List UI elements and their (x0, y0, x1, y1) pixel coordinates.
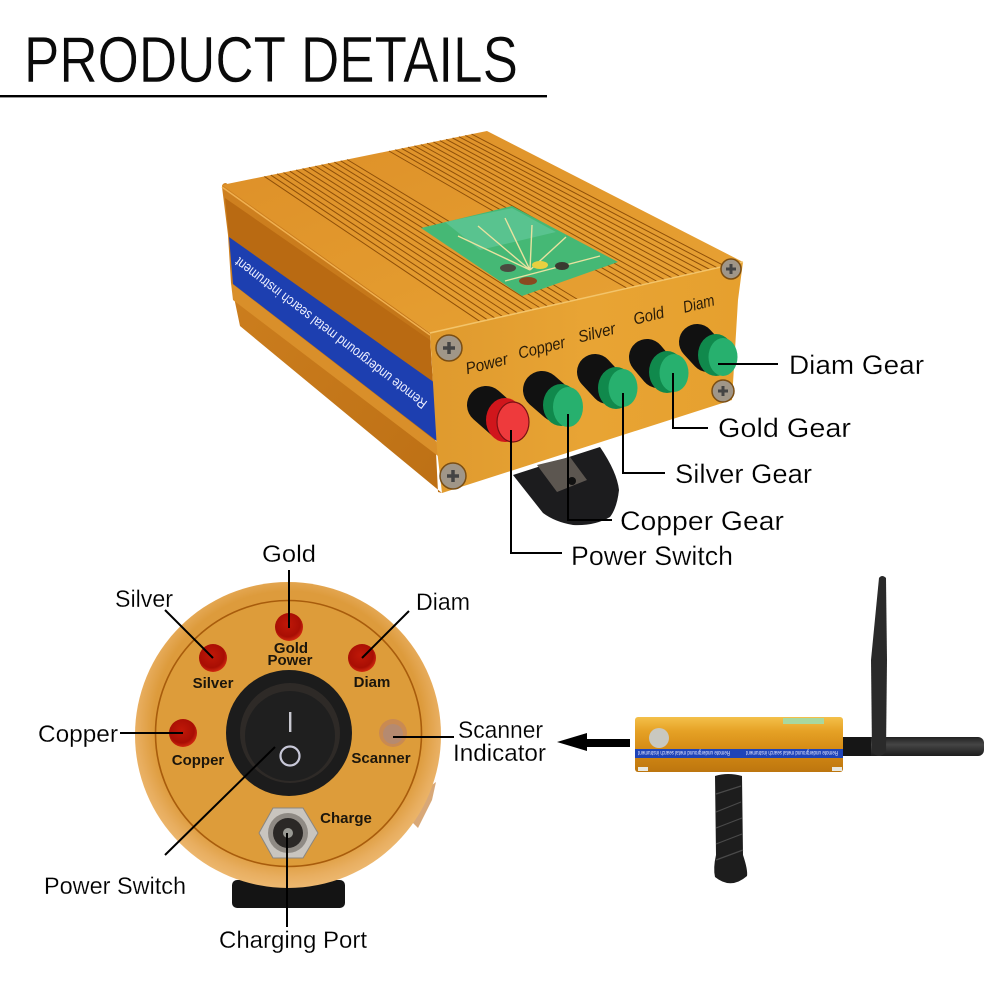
button: gold (green) (647, 351, 688, 393)
callout: gold led: Gold (262, 541, 316, 568)
mini sticker (783, 718, 824, 724)
title (0, 23, 547, 97)
arrow pointing to device end (557, 733, 630, 751)
callout: power switch (511, 430, 733, 571)
grip handle (714, 774, 747, 883)
LED: gold (275, 613, 303, 641)
antenna (871, 576, 887, 756)
callout: gold gear (673, 373, 851, 443)
callout: power switch: Power Switch (571, 541, 733, 571)
logo badge (649, 728, 669, 748)
callout: gold gear: Gold Gear (718, 413, 851, 443)
callout: copper gear: Copper Gear (620, 506, 784, 536)
panel engraved labels: Gold (274, 640, 308, 657)
callout: silver gear: Silver Gear (675, 459, 812, 489)
handheld scanner device (635, 576, 984, 883)
title: PRODUCT (24, 23, 286, 96)
button: diam (green) (697, 334, 738, 376)
front panel (430, 259, 743, 493)
callout: scanner indicator: Indicator (453, 740, 546, 767)
callout: silver led (115, 586, 213, 658)
panel engraved labels: Silver (193, 675, 234, 692)
product photo: gold detector box (222, 131, 743, 525)
panel labels: Copper (516, 333, 569, 363)
blue band (635, 749, 843, 758)
blue band: Remote underground metal search instrument (746, 749, 838, 756)
button: silver (green) (595, 367, 638, 409)
panel labels: Power (464, 350, 511, 378)
panel labels (464, 292, 716, 378)
callout: scanner indicator (393, 717, 546, 767)
rear rod (860, 737, 984, 756)
control panel photo (135, 582, 441, 908)
panel engraved labels: Scanner (351, 750, 411, 767)
callout: diam gear: Diam Gear (789, 350, 924, 380)
callout: diam led: Diam (416, 589, 470, 616)
callout: silver gear (623, 393, 812, 489)
LED: copper (169, 719, 197, 747)
LED: diam (348, 644, 376, 672)
title: DETAILS (301, 23, 518, 96)
green sticker (421, 206, 618, 296)
side face (222, 183, 442, 493)
screws (436, 259, 741, 489)
outer disc (135, 582, 441, 888)
panel engraved labels: Diam (354, 674, 390, 691)
blue label strip (229, 237, 438, 442)
button: power (red) (486, 398, 529, 442)
callout: silver led: Silver (115, 586, 173, 613)
button: copper (green) (542, 384, 583, 427)
panel engraved labels: Copper (172, 752, 224, 769)
panel engraved labels (172, 640, 411, 827)
side tab (412, 782, 436, 828)
blue band: Remote underground metal search instrument (638, 749, 730, 756)
callout: copper led: Copper (38, 721, 118, 748)
stem below disc (232, 880, 345, 908)
black clip under box (513, 447, 619, 525)
panel labels: Diam (681, 292, 716, 317)
inner ring (156, 600, 422, 866)
gold tube (635, 717, 843, 772)
callout: copper gear (568, 414, 784, 536)
panel labels: Gold (632, 303, 667, 329)
connector (843, 737, 871, 756)
panel engraved labels: Power (267, 652, 313, 669)
blue label strip: Remote underground metal search instrument (231, 254, 430, 412)
panel engraved labels: Charge (320, 810, 372, 827)
end tags (638, 767, 842, 771)
top face with ridges (222, 131, 743, 335)
LED: silver (199, 644, 227, 672)
LED: scanner (379, 719, 407, 747)
callout: power switch on panel (44, 747, 275, 900)
callout: scanner indicator: Scanner (458, 717, 543, 744)
callout: charging port: Charging Port (219, 927, 367, 954)
callout: gold led (262, 541, 316, 628)
callout: power switch on panel: Power Switch (44, 873, 186, 900)
panel labels: Silver (576, 319, 619, 346)
charge port (259, 808, 318, 858)
rocker switch (226, 670, 352, 796)
callout: diam led (362, 589, 470, 658)
